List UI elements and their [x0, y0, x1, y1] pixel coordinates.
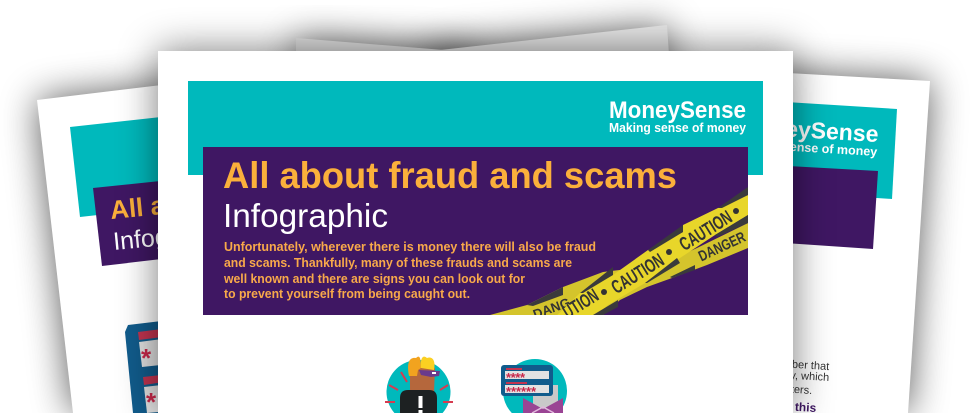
warning dashes [385, 372, 453, 402]
right page logo: MoneySense [737, 113, 879, 147]
tape lettering: UTION [559, 285, 603, 323]
left page title: Infographic [112, 216, 238, 256]
intro text [223, 239, 596, 301]
tape lettering [559, 207, 739, 323]
intro text: Unfortunately, wherever there is money there will also be fraud [224, 239, 596, 254]
right page logo: Making sense of money [736, 137, 878, 159]
icon: email with passwords: **** [506, 370, 526, 385]
right page logo [793, 122, 878, 158]
left page title [112, 197, 158, 250]
lower tape lettering: DANG [531, 295, 572, 322]
back pages [296, 25, 670, 70]
lower tape lettering [532, 232, 746, 315]
icon: email with passwords [501, 359, 567, 413]
lower tape [490, 223, 748, 315]
right page purple banner [793, 166, 878, 249]
lower tape lettering: DANGER [696, 229, 748, 265]
intro text: well known and there are signs you can look out for [223, 271, 525, 286]
left page card icon [125, 321, 158, 413]
left page purple banner [93, 181, 158, 266]
left page [12, 59, 158, 413]
heading: All about fraud and scams [223, 155, 677, 196]
left page card icon: * [141, 343, 152, 373]
left page title: All about [109, 184, 223, 225]
caution tape [490, 187, 748, 323]
main page [158, 51, 793, 413]
tape lettering: CAUTION [608, 250, 668, 299]
icon: fraudster [385, 357, 453, 413]
right page body text: money, which [763, 368, 830, 384]
right page teal header [793, 102, 897, 199]
intro text: to prevent yourself from being caught out. [224, 286, 470, 301]
upper tape [552, 195, 748, 320]
right page body text: letters. [779, 383, 813, 397]
tape folds [527, 187, 748, 315]
logo: Making sense of money [609, 120, 747, 135]
page shadows [273, 1, 694, 51]
intro text: and scams. Thankfully, many of these frauds and scams are [224, 255, 572, 270]
purple banner [203, 147, 748, 323]
logo [610, 101, 746, 134]
logo: MoneySense [609, 97, 746, 124]
right page body text: member that [767, 357, 830, 373]
subheading: Infographic [223, 197, 388, 234]
tape lettering: CAUTION [676, 207, 736, 256]
icon: email with passwords: ****** [506, 384, 537, 399]
teal header [188, 81, 763, 175]
right page body text [793, 360, 830, 412]
left page teal header [70, 117, 158, 217]
right page [736, 72, 930, 413]
